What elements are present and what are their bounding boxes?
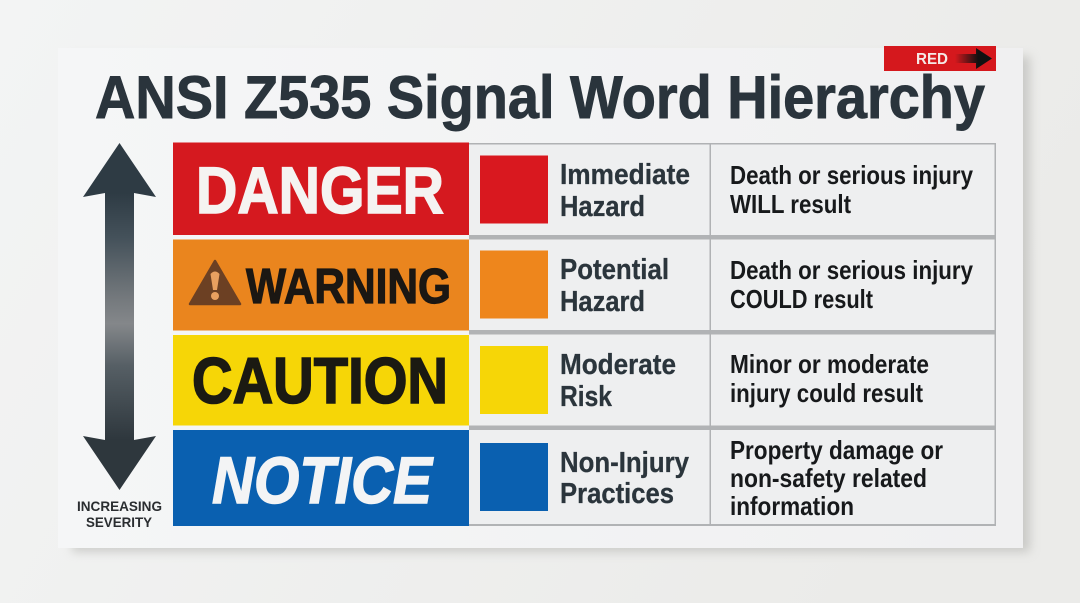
severity arrow	[83, 143, 156, 490]
title: ANSI Z535 Signal Word Hierarchy	[95, 64, 986, 131]
red colour tag with arrow	[884, 46, 996, 71]
severity label: SEVERITY	[86, 514, 153, 530]
banner: danger: DANGER	[196, 153, 444, 227]
red colour tag with arrow: RED	[916, 51, 948, 68]
swatch: blue	[480, 443, 548, 511]
hazard level: danger: Immediate	[560, 159, 690, 191]
hazard level: notice	[560, 447, 689, 510]
hazard level: notice: Practices	[560, 478, 674, 510]
banner: caution: CAUTION	[192, 344, 448, 417]
swatch: orange	[480, 250, 548, 318]
swatch: red	[480, 156, 548, 224]
hazard level: warning: Hazard	[560, 286, 645, 318]
consequence: notice: information	[730, 491, 854, 521]
card panel	[58, 48, 1023, 548]
severity label	[77, 498, 162, 530]
banner: notice: NOTICE	[212, 443, 434, 517]
severity label: INCREASING	[77, 498, 162, 514]
hazard level: warning: Potential	[560, 254, 669, 286]
hazard level: caution: Moderate	[560, 349, 676, 381]
consequence: danger: Death or serious injury	[730, 160, 973, 190]
hazard level: danger	[560, 159, 690, 223]
card shadow	[72, 56, 1030, 552]
consequence: caution	[730, 349, 929, 408]
consequence: warning: Death or serious injury	[730, 255, 973, 285]
consequence: notice	[730, 435, 943, 521]
banner: warning	[173, 240, 469, 330]
swatch: yellow	[480, 346, 548, 414]
hazard level: danger: Hazard	[560, 191, 645, 223]
consequence: danger	[730, 160, 973, 219]
hazard level: caution	[560, 349, 676, 413]
hazard level: caution: Risk	[560, 381, 613, 413]
consequence: notice: Property damage or	[730, 435, 943, 465]
consequence: warning	[730, 255, 973, 314]
consequence: danger: WILL result	[730, 189, 851, 219]
table cells and grid	[469, 143, 996, 526]
consequence: notice: non-safety related	[730, 463, 927, 493]
hazard level: warning	[560, 254, 669, 318]
banner: notice	[173, 430, 469, 526]
consequence: caution: injury could result	[730, 378, 923, 408]
icon: warning triangle	[190, 261, 240, 304]
hazard level: notice: Non-Injury	[560, 447, 689, 479]
consequence: warning: COULD result	[730, 284, 873, 314]
consequence: caution: Minor or moderate	[730, 349, 929, 379]
banner: warning: WARNING	[246, 260, 451, 314]
